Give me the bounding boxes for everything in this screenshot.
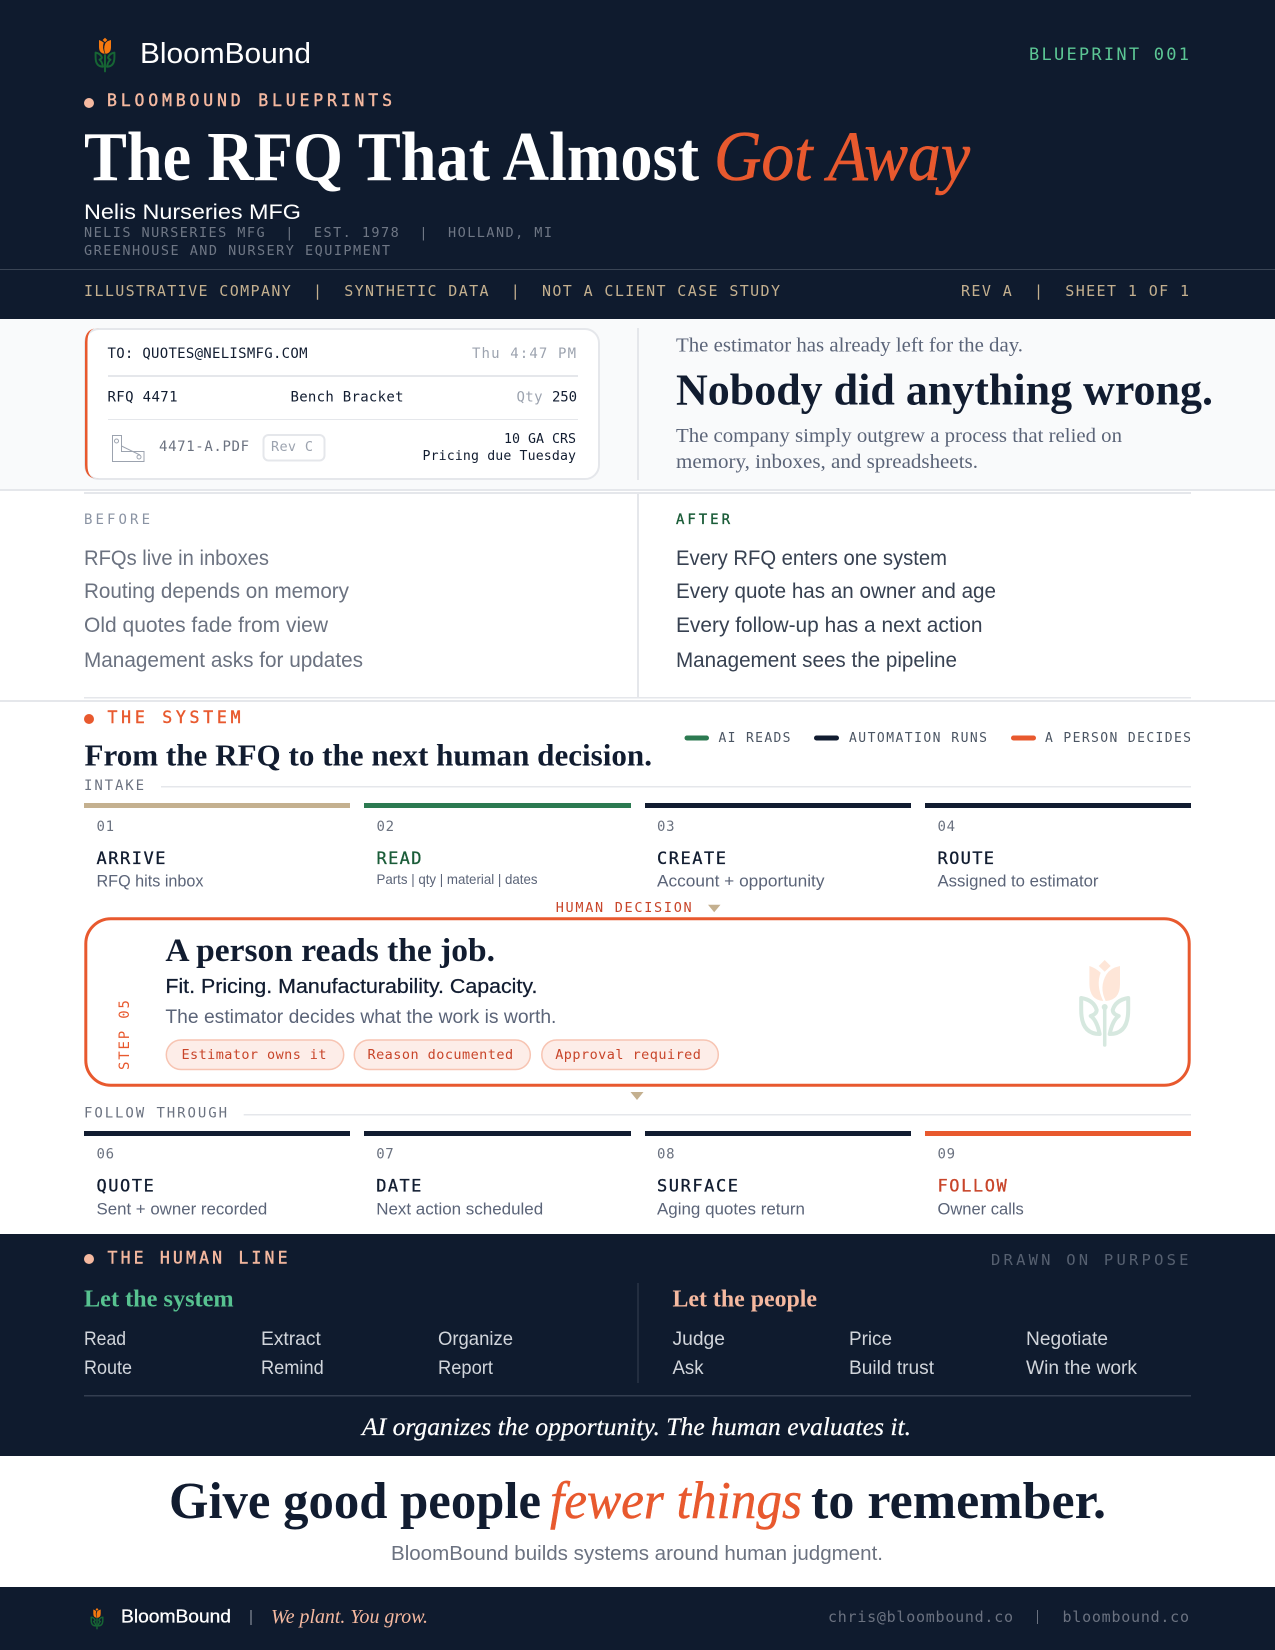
- file name: 4471-A.PDF: [159, 439, 249, 455]
- disclaimer bar: ILLUSTRATIVE COMPANY | SYNTHETIC DATA | NOT A CLIENT CASE STUDY: [84, 282, 780, 300]
- panel: before and after: [0, 492, 1275, 702]
- icon: BloomBound tulip logo: [96, 38, 114, 71]
- after column: Every quote has an owner and age: [676, 580, 996, 603]
- panel: header: [0, 0, 1275, 319]
- tag: reason documented: [354, 1040, 530, 1070]
- panel: the system: [84, 708, 1191, 1218]
- step 02: 02: [376, 819, 394, 835]
- step 06: QUOTE: [96, 1177, 154, 1197]
- before column: RFQs live in inboxes: [84, 547, 269, 570]
- step 07: [364, 1131, 631, 1218]
- email address: TO: QUOTES@NELISMFG.COM: [108, 346, 308, 362]
- step 03: [645, 803, 911, 890]
- company name: Nelis Nurseries MFG: [84, 200, 301, 224]
- step 06: [84, 1131, 350, 1218]
- before column: Routing depends on memory: [84, 580, 349, 603]
- explanation: The company simply outgrew a process that relied on: [676, 425, 1122, 447]
- brand name: BloomBound: [140, 38, 311, 70]
- step 07: Next action scheduled: [376, 1199, 543, 1218]
- scene note: The estimator has already left for the day.: [676, 336, 1023, 356]
- quantity: Qty: [516, 390, 542, 406]
- let the people column: Win the work: [1026, 1357, 1137, 1379]
- human decision label: HUMAN DECISION: [556, 900, 692, 916]
- decision note: The estimator decides what the work is worth.: [165, 1007, 556, 1028]
- italic summary line: AI organizes the opportunity. The human evaluates it.: [360, 1414, 911, 1441]
- step 02: Parts | qty | material | dates: [376, 871, 538, 887]
- step 02: READ: [376, 849, 422, 869]
- step 07: DATE: [376, 1177, 421, 1197]
- part name: Bench Bracket: [290, 390, 404, 406]
- disclaimer bar: REV A | SHEET 1 OF 1: [961, 282, 1189, 300]
- after column: Management sees the pipeline: [676, 649, 957, 672]
- let the system column: Extract: [261, 1328, 321, 1350]
- before column: [84, 512, 363, 672]
- after column: Every follow-up has a next action: [676, 614, 982, 637]
- closing subline: BloomBound builds systems around human judgment.: [391, 1542, 883, 1565]
- after column: AFTER: [676, 512, 731, 528]
- disclaimer bar: [84, 282, 1189, 300]
- legend: A PERSON DECIDES: [1045, 731, 1191, 746]
- company details: NELIS NURSERIES MFG | EST. 1978 | HOLLAND, MI: [84, 225, 552, 241]
- company details: [84, 225, 552, 259]
- tag: estimator owns it: Estimator owns it: [182, 1047, 326, 1063]
- legend: AUTOMATION RUNS: [849, 731, 987, 746]
- let the people column: Build trust: [849, 1357, 935, 1379]
- after column: [676, 512, 996, 672]
- step 04: Assigned to estimator: [938, 872, 1099, 890]
- eyebrow: BloomBound Blueprints: BLOOMBOUND BLUEPRINTS: [107, 91, 392, 110]
- step 03: Account + opportunity: [657, 872, 825, 890]
- legend: [684, 731, 1191, 746]
- before column: BEFORE: [84, 512, 150, 528]
- contact details: [828, 1608, 1189, 1626]
- let the system column: Route: [84, 1357, 132, 1379]
- eyebrow: the system: THE SYSTEM: [108, 708, 241, 727]
- tag: estimator owns it: [166, 1040, 344, 1070]
- legend: AI READS: [718, 731, 790, 746]
- closing headline: fewer things: [550, 1472, 802, 1530]
- RFQ email card: [85, 328, 599, 479]
- headline: nobody did anything wrong: Nobody did anything wrong.: [676, 366, 1213, 414]
- tag: approval required: Approval required: [555, 1047, 701, 1063]
- step 09: 09: [938, 1147, 955, 1163]
- let the system column: Let the system: [84, 1286, 234, 1312]
- before column: Management asks for updates: [84, 649, 363, 672]
- step 08: 08: [657, 1147, 674, 1163]
- icon: bracket drawing: [112, 436, 144, 462]
- intake label: INTAKE: [84, 778, 144, 794]
- decision headline: A person reads the job.: [165, 933, 495, 969]
- panel: closing statement: [0, 1456, 1275, 1587]
- let the people column: Price: [849, 1328, 892, 1350]
- step 03: 03: [657, 819, 674, 835]
- let the system column: [84, 1286, 513, 1379]
- before column: Old quotes fade from view: [84, 614, 329, 637]
- step 01: RFQ hits inbox: [96, 872, 204, 890]
- let the people column: Judge: [672, 1328, 725, 1350]
- contact details: bloombound.co: [1062, 1608, 1189, 1626]
- arrow: decision to follow through: [630, 1092, 644, 1100]
- title: Got Away: [714, 118, 970, 196]
- explanation: [676, 425, 1122, 473]
- RFQ number: RFQ 4471: [108, 390, 178, 406]
- let the system column: Read: [84, 1328, 126, 1350]
- section heading: From the RFQ to the next human decision.: [84, 738, 652, 772]
- tag: reason documented: Reason documented: [368, 1047, 513, 1063]
- step 01: [84, 803, 350, 890]
- blueprint number: BLUEPRINT 001: [1029, 45, 1189, 65]
- step 09: FOLLOW: [938, 1177, 1008, 1197]
- step 08: Aging quotes return: [657, 1199, 805, 1218]
- step 09: Owner calls: [938, 1199, 1024, 1218]
- closing headline: to remember.: [811, 1473, 1106, 1530]
- step 05 label: STEP 05: [117, 1000, 133, 1070]
- step 04: 04: [938, 819, 955, 835]
- step 03: CREATE: [657, 849, 726, 869]
- step 08: SURFACE: [657, 1177, 738, 1197]
- step 01: ARRIVE: [96, 849, 166, 869]
- after column: Every RFQ enters one system: [676, 547, 947, 570]
- panel: the human line: [0, 1234, 1275, 1456]
- material: 10 GA CRS: [504, 432, 576, 447]
- step 07: 07: [376, 1147, 394, 1163]
- drawn on purpose note: DRAWN ON PURPOSE: [991, 1251, 1188, 1269]
- quantity: [516, 390, 577, 406]
- step 04: [925, 803, 1191, 890]
- follow through label: FOLLOW THROUGH: [84, 1106, 227, 1122]
- let the people column: Ask: [672, 1357, 704, 1379]
- title: The RFQ That Almost: [84, 119, 699, 196]
- step 04: ROUTE: [938, 849, 994, 869]
- tagline: We plant. You grow.: [271, 1607, 428, 1628]
- let the people column: Let the people: [672, 1286, 817, 1312]
- revision tag: Rev C: [271, 439, 313, 455]
- panel: situation: [0, 319, 1275, 491]
- due date: Pricing due Tuesday: [422, 449, 576, 464]
- step 02: [364, 803, 631, 887]
- step 08: [645, 1131, 911, 1218]
- let the people column: [672, 1286, 1137, 1379]
- panel: footer: [0, 1587, 1275, 1650]
- tag: approval required: [542, 1040, 718, 1070]
- revision tag: [264, 435, 324, 460]
- quantity: 250: [552, 390, 577, 406]
- company details: GREENHOUSE AND NURSERY EQUIPMENT: [84, 243, 390, 259]
- timestamp: Thu 4:47 PM: [472, 346, 576, 362]
- eyebrow: the human line: THE HUMAN LINE: [108, 1249, 288, 1268]
- explanation: memory, inboxes, and spreadsheets.: [676, 451, 978, 473]
- step 09: [925, 1131, 1191, 1218]
- icon: ghost tulip: [1081, 960, 1128, 1045]
- decision criteria: Fit. Pricing. Manufacturability. Capacity.: [165, 976, 537, 998]
- let the people column: Negotiate: [1026, 1328, 1108, 1350]
- contact details: chris@bloombound.co: [828, 1608, 1013, 1626]
- closing headline: [169, 1472, 1106, 1530]
- let the system column: Remind: [261, 1357, 324, 1379]
- step 01: 01: [96, 819, 114, 835]
- let the system column: Organize: [438, 1328, 513, 1350]
- icon: footer tulip logo: [91, 1608, 103, 1629]
- step 06: 06: [96, 1147, 114, 1163]
- closing headline: Give good people: [169, 1473, 541, 1530]
- panel: human decision: [86, 919, 1189, 1085]
- step 06: Sent + owner recorded: [96, 1199, 267, 1218]
- let the system column: Report: [438, 1357, 494, 1379]
- footer brand: BloomBound: [121, 1606, 231, 1627]
